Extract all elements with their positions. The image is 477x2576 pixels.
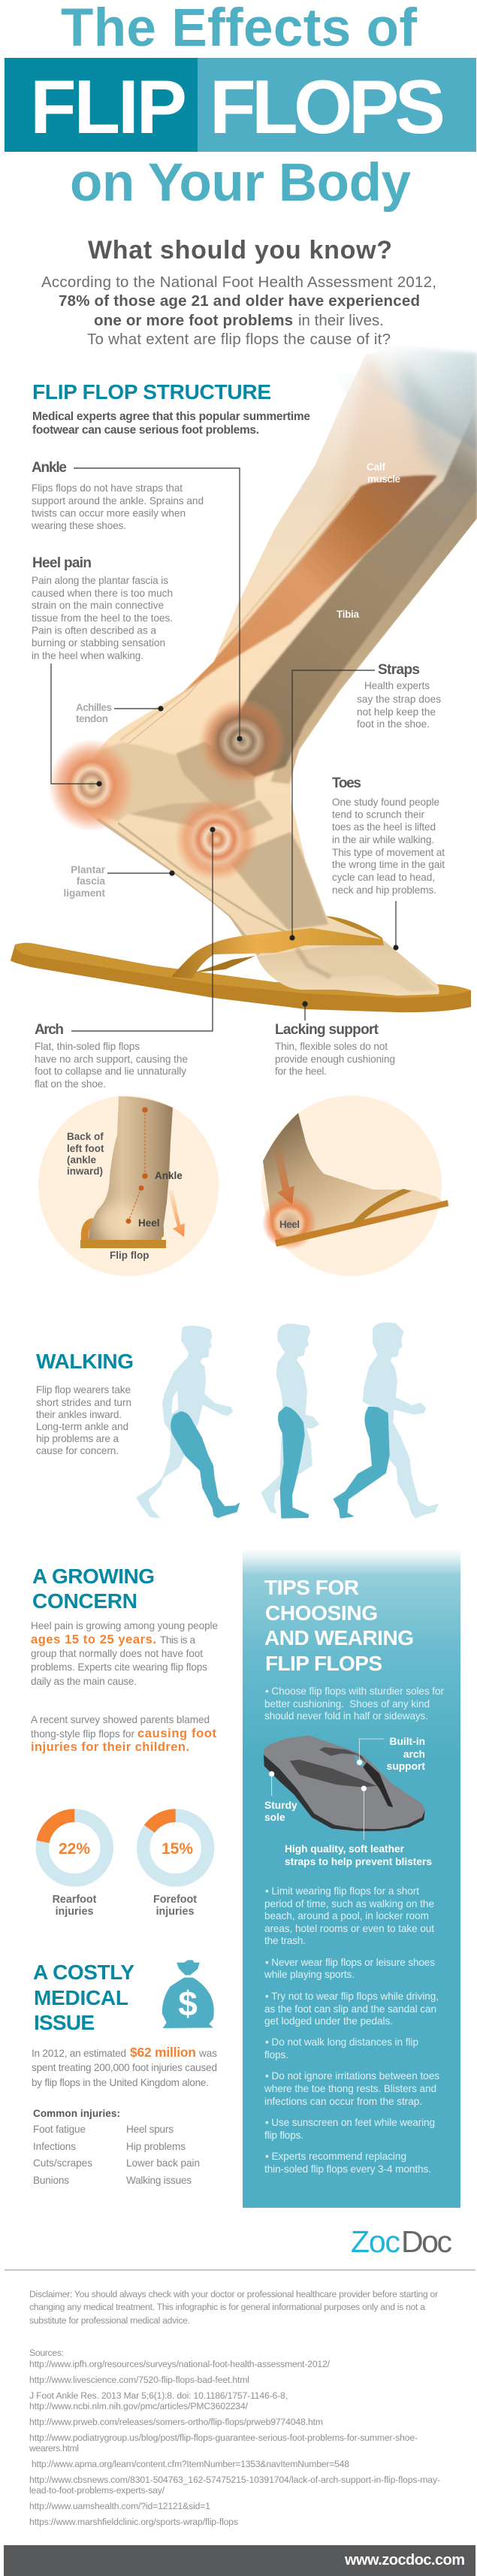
tips list: beach, around a pool, in locker room: [264, 1910, 429, 1921]
text block: straps: say the strap does: [357, 694, 441, 705]
label: achilles tendon: tendon: [76, 713, 108, 724]
donut chart: forefoot injuries 15%: 15%: [162, 1840, 193, 1858]
thong strap: [349, 1189, 412, 1226]
illustration: recommended sandal: [264, 1735, 432, 1867]
label: plantar fascia ligament: Plantar: [71, 864, 106, 875]
panel: a growing concern: ages 15 to 25 years.: [31, 1633, 156, 1646]
text block: toes: tend to scrunch their: [332, 809, 424, 821]
text block: arch: Arch: [35, 1022, 64, 1038]
common injuries list: Foot fatigue: [33, 2124, 86, 2135]
text block: heel pain: Heel pain: [32, 555, 92, 571]
disclaimer: substitute for professional medical advice.: [29, 2315, 190, 2326]
sole: [275, 1200, 448, 1247]
text block: toes: the wrong time in the gait: [332, 859, 445, 870]
text block: arch: foot to collapse and lie unnaturally: [35, 1066, 186, 1077]
panel: flip flop structure heading: footwear can cause serious foot problems.: [32, 424, 259, 437]
common injuries list: Heel spurs: [126, 2124, 174, 2135]
text block: heel pain: burning or stabbing sensation: [32, 637, 165, 649]
sole: [80, 1240, 166, 1248]
sources: http://www.livescience.com/7520-flip-flops-bad-feet.html: [29, 2375, 249, 2385]
panel: a costly medical issue: [32, 1961, 217, 2186]
text block: arch: [35, 1022, 188, 1090]
panel: a costly medical issue: MEDICAL: [34, 1986, 128, 2009]
panel: tips for choosing and wearing flip flops: [243, 1548, 460, 2208]
icon: money bag: [162, 1960, 214, 2028]
text block: straps: Straps: [378, 662, 420, 678]
panel: a growing concern: injuries for their children.: [31, 1740, 189, 1754]
sources: http://www.apma.org/learn/content.cfm?ItemNumber=1353&navItemNumber=548: [32, 2459, 349, 2469]
common injuries list: [33, 2108, 200, 2186]
sandal labels: Built-in: [389, 1736, 425, 1747]
text block: toes: This type of movement at: [332, 847, 445, 858]
label: plantar fascia ligament: [63, 864, 106, 899]
panel: a growing concern: group that normally does not have foot: [31, 1648, 203, 1659]
sources: J Foot Ankle Res. 2013 Mar 5;6(1):8. doi: 10.1186/1757-1146-6-8,: [29, 2390, 288, 2401]
figure 3: [334, 1323, 438, 1518]
illustration: back of left foot: [38, 1096, 219, 1276]
panel: a growing concern: A recent survey showed parents blamed: [31, 1714, 210, 1725]
tips list: • Do not walk long distances in flip: [265, 2036, 418, 2048]
tips list: flops.: [264, 2049, 288, 2060]
foot labels: Ankle: [155, 1170, 183, 1181]
common injuries list: Walking issues: [126, 2175, 192, 2186]
text block: ankle: wearing these shoes.: [31, 520, 126, 531]
panel: tips for choosing and wearing flip flops: TIPS FOR: [264, 1576, 359, 1599]
panel: flip flop structure heading: [32, 380, 310, 437]
text block: lacking support: Thin, flexible soles do not: [275, 1041, 388, 1052]
title banner: [5, 58, 476, 152]
text block: toes: cycle can lead to head,: [332, 872, 435, 883]
tips list: the trash.: [264, 1935, 306, 1946]
flip flop thong strap: [171, 928, 384, 978]
common injuries list: Lower back pain: [126, 2157, 200, 2169]
text block: straps: foot in the shoe.: [357, 718, 430, 730]
text block: heel pain: in the heel when walking.: [32, 650, 143, 661]
anatomy illustration: leg and foot in flip flop: [11, 346, 477, 1031]
foot labels: left foot: [67, 1143, 104, 1154]
disclaimer: [29, 2289, 438, 2326]
sandal labels: straps to help prevent blisters: [285, 1856, 432, 1867]
intro heading: What should you know?: [88, 236, 392, 265]
tips list: [264, 1885, 439, 2175]
text block: lacking support: Lacking support: [275, 1022, 379, 1038]
text block: toes: neck and hip problems.: [332, 884, 436, 896]
panel: a costly medical issue: $62 million: [130, 2045, 196, 2060]
common injuries list: Cuts/scrapes: [33, 2157, 92, 2169]
sandal labels: support: [387, 1761, 425, 1772]
foot: [263, 1113, 443, 1241]
sandal labels: arch: [403, 1749, 425, 1760]
text block: ankle: [31, 460, 204, 531]
sources: http://www.ipfh.org/resources/surveys/national-foot-health-assessment-2012/: [29, 2359, 331, 2369]
foot labels: Heel: [138, 1217, 160, 1229]
panel: a costly medical issue: ISSUE: [34, 2011, 95, 2034]
panel: a growing concern: A GROWING: [32, 1565, 155, 1588]
tips list: infections can occur from the strap.: [264, 2096, 422, 2107]
common injuries list: Bunions: [33, 2175, 69, 2186]
tips list: thin-soled flip flops every 3-4 months.: [264, 2163, 431, 2175]
foot labels: Back of: [67, 1131, 104, 1142]
sandal labels: sole: [264, 1812, 285, 1823]
foot bones: [81, 742, 328, 930]
text block: straps: Health experts: [364, 680, 430, 691]
text block: arch: have no arch support, causing the: [35, 1054, 188, 1065]
sandal labels: [264, 1736, 432, 1867]
text block: lacking support: provide enough cushioning: [275, 1054, 395, 1065]
label: plantar fascia ligament: ligament: [63, 887, 105, 899]
label: calf muscle: Calf: [367, 461, 386, 473]
title: [5, 0, 476, 213]
tips list: • Limit wearing flip flops for a short: [265, 1885, 419, 1897]
tips list: • Try not to wear flip flops while driving,: [265, 1991, 439, 2002]
tips list: flip flops.: [264, 2130, 303, 2141]
text block: walking: Flip flop wearers take: [36, 1384, 131, 1395]
text block: walking: their ankles inward.: [36, 1409, 122, 1420]
text block: ankle: support around the ankle. Sprains and: [32, 495, 204, 506]
title banner: FLIP: [30, 65, 187, 150]
figure 1: [137, 1326, 239, 1517]
foot labels: Flip flop: [110, 1250, 149, 1261]
intro text: To what extent are flip flops the cause of it?: [87, 331, 391, 348]
logo: ZocDoc: Zoc: [351, 2224, 400, 2259]
illustration: side of foot with heel impact: [261, 1096, 448, 1276]
label: calf muscle: [367, 461, 400, 485]
text block: toes: [332, 776, 445, 896]
figure 2: [261, 1324, 319, 1518]
text block: walking: cause for concern.: [36, 1445, 119, 1456]
tips list: • Never wear flip flops or leisure shoes: [265, 1957, 435, 1968]
panel: a growing concern: Heel pain is growing among young people: [31, 1620, 218, 1631]
panel: tips for choosing and wearing flip flops: AND WEARING: [264, 1626, 414, 1649]
arrow: ankle rolling: [168, 1190, 185, 1237]
panel: a growing concern: problems. Experts cite wearing flip flops: [31, 1661, 207, 1673]
label: achilles tendon: [76, 702, 112, 724]
text block: ankle: twists can occur more easily when: [32, 508, 186, 519]
arrow: downward force: [272, 1141, 294, 1205]
rear leg and heel: [89, 1096, 173, 1240]
achilles tendon: [120, 492, 349, 740]
intro text: in their lives.: [298, 312, 384, 329]
footer bar: [4, 2545, 475, 2576]
donut chart: rearfoot injuries 22%: [42, 1816, 107, 1918]
heel highlight: [96, 1203, 144, 1239]
sources: http://www.ncbi.nlm.nih.gov/pmc/articles/PMC3602234/: [29, 2401, 249, 2411]
leg and foot skin: [80, 353, 477, 996]
disclaimer: changing any medical treatment. This infographic is for general informational purposes only and is not a: [29, 2302, 425, 2312]
pain rings: [48, 739, 135, 832]
panel: a growing concern: This is a: [160, 1634, 195, 1646]
text block: toes: toes as the heel is lifted: [332, 821, 436, 833]
panel: a growing concern: [31, 1565, 218, 1754]
panel: flip flop structure heading: Medical experts agree that this popular summertime: [32, 410, 310, 423]
heel glow: [262, 1196, 316, 1250]
heel label: Heel: [279, 1219, 300, 1230]
tibia bands: [270, 488, 477, 784]
intro text: one or more foot problems: [94, 312, 293, 329]
panel: a costly medical issue: was: [198, 2048, 217, 2059]
text block: heel pain: Pain is often described as a: [32, 625, 156, 636]
donut chart: forefoot injuries 15%: Forefoot: [153, 1894, 197, 1906]
donut chart: rearfoot injuries 22%: Rearfoot: [53, 1894, 97, 1906]
intro text: [41, 274, 436, 348]
text block: arch: flat on the shoe.: [35, 1078, 106, 1090]
sources: http://www.podiatrygroup.us/blog/post/flip-flops-guarantee-serious-foot-problems-for-summer-shoe-: [29, 2432, 418, 2443]
panel: a growing concern: CONCERN: [32, 1589, 137, 1613]
foot labels: [67, 1131, 183, 1261]
donut chart: forefoot injuries 15%: injuries: [156, 1906, 194, 1918]
sources: lead-to-foot-problems-experts-say/: [29, 2485, 165, 2496]
text block: arch: Flat, thin-soled flip flops: [35, 1041, 140, 1052]
flip flop side straps: [81, 1218, 164, 1240]
blue tint outside leg top: [312, 346, 477, 451]
common injuries list: Hip problems: [126, 2141, 186, 2152]
tips list: as the foot can slip and the sandal can: [264, 2003, 436, 2015]
common injuries list: Infections: [33, 2141, 76, 2152]
panel: a growing concern: thong-style flip flops for: [31, 1728, 134, 1740]
sources: https://www.marshfieldclinic.org/sports-wrap/flip-flops: [29, 2517, 238, 2527]
label: achilles tendon: Achilles: [76, 702, 112, 713]
donut chart: forefoot injuries 15%: [143, 1816, 208, 1918]
text block: heel pain: caused when there is too much: [32, 588, 173, 599]
tips list: • Experts recommend replacing: [265, 2151, 406, 2162]
text block: toes: One study found people: [332, 797, 439, 808]
label: calf muscle: muscle: [367, 473, 400, 485]
text block: heel pain: strain on the main connective: [32, 600, 164, 611]
back strap of flip flop: [327, 916, 384, 945]
logo: ZocDoc: Doc: [401, 2224, 452, 2259]
heading: walking: WALKING: [36, 1350, 134, 1373]
text block: heel pain: [32, 555, 173, 661]
sources: http://www.prweb.com/releases/somers-ortho/flip-flops/prweb9774048.htm: [29, 2417, 323, 2427]
sandal labels: Sturdy: [264, 1800, 297, 1811]
donut chart: rearfoot injuries 22%: injuries: [56, 1906, 93, 1918]
panel: tips for choosing and wearing flip flops: should never fold in half or sideways.: [264, 1710, 428, 1722]
logo: ZocDoc: [351, 2224, 452, 2259]
tips list: get lodged under the pedals.: [264, 2015, 393, 2027]
sources: http://www.uamshealth.com/?id=12121&sid=1: [29, 2501, 210, 2511]
panel: a costly medical issue: spent treating 200,000 foot injuries caused: [32, 2062, 217, 2073]
panel: a growing concern: causing foot: [137, 1727, 216, 1740]
panel: tips for choosing and wearing flip flops: CHOOSING: [265, 1601, 378, 1625]
soft inner shading: [81, 353, 477, 954]
walking figures: [137, 1324, 319, 1518]
panel: tips for choosing and wearing flip flops: • Choose flip flops with sturdier soles for: [265, 1686, 444, 1697]
text block: walking: Long-term ankle and: [36, 1421, 128, 1432]
foot labels: (ankle: [67, 1154, 97, 1166]
intro text: According to the National Foot Health Assessment 2012,: [41, 274, 436, 291]
footer bar: www.zocdoc.com: [344, 2552, 465, 2568]
dashed alignment lines: [126, 1107, 148, 1223]
text block: ankle: Flips flops do not have straps that: [32, 482, 183, 494]
tips list: • Use sunscreen on feet while wearing: [265, 2117, 435, 2128]
sources: [29, 2348, 440, 2527]
panel: tips for choosing and wearing flip flops: better cushioning. Shoes of any kind: [264, 1698, 430, 1710]
tips list: • Do not ignore irritations between toes: [265, 2070, 439, 2082]
text block: heel pain: Pain along the plantar fascia is: [32, 575, 168, 586]
foot front over sole: [257, 939, 439, 996]
label: tibia: Tibia: [337, 609, 359, 620]
panel: flip flop structure heading: FLIP FLOP STRUCTURE: [32, 380, 271, 404]
text block: lacking support: [275, 1022, 395, 1077]
panel: tips for choosing and wearing flip flops: FLIP FLOPS: [265, 1652, 382, 1675]
title: The Effects of: [61, 0, 417, 58]
common injuries list: Common injuries:: [33, 2108, 120, 2119]
panel: a costly medical issue: In 2012, an estimated: [32, 2048, 126, 2059]
text block: straps: not help keep the: [357, 706, 436, 718]
panel: a growing concern: daily as the main cause.: [31, 1676, 137, 1687]
text block: lacking support: for the heel.: [275, 1066, 327, 1077]
text block: toes: in the air while walking.: [332, 834, 434, 845]
text block: walking: short strides and turn: [36, 1397, 131, 1408]
text block: ankle: Ankle: [32, 460, 67, 476]
tips list: while playing sports.: [264, 1969, 355, 1980]
tips list: where the toe thong rests. Blisters and: [264, 2083, 436, 2094]
sources: http://www.cbsnews.com/8301-504763_162-57475215-10391704/lack-of-arch-support-in-flip-flops-may-: [29, 2475, 440, 2485]
text block: heel pain: tissue from the heel to the toes.: [32, 612, 173, 624]
text block: toes: Toes: [332, 776, 361, 791]
text block: walking: hip problems are a: [36, 1433, 119, 1444]
sandal labels: High quality, soft leather: [285, 1843, 405, 1855]
icon: money bag: $: [178, 1984, 198, 2023]
title: on Your Body: [70, 153, 412, 213]
calf muscle: [180, 476, 437, 695]
panel: a costly medical issue: by flip flops in the United Kingdom alone.: [32, 2077, 209, 2088]
panel: a costly medical issue: A COSTLY: [33, 1961, 134, 1984]
donut chart: rearfoot injuries 22%: 22%: [59, 1840, 90, 1858]
sources: Sources:: [29, 2348, 64, 2358]
text block: straps: [357, 662, 441, 730]
text block: walking: [36, 1384, 131, 1456]
anatomy leader lines and dots: [51, 468, 399, 1031]
tips list: period of time, such as walking on the: [264, 1898, 434, 1909]
sources: wearers.html: [29, 2443, 79, 2454]
foot labels: inward): [67, 1166, 103, 1177]
tips list: areas, hotel rooms or even to take out: [264, 1923, 434, 1934]
intro text: 78% of those age 21 and older have experienced: [59, 292, 420, 310]
title banner: FLOPS: [210, 65, 445, 150]
disclaimer: Disclaimer: You should always check with your doctor or professional healthcare provider before starting or: [29, 2289, 438, 2299]
flip flop sole: [11, 943, 471, 1012]
label: plantar fascia ligament: fascia: [77, 875, 105, 887]
